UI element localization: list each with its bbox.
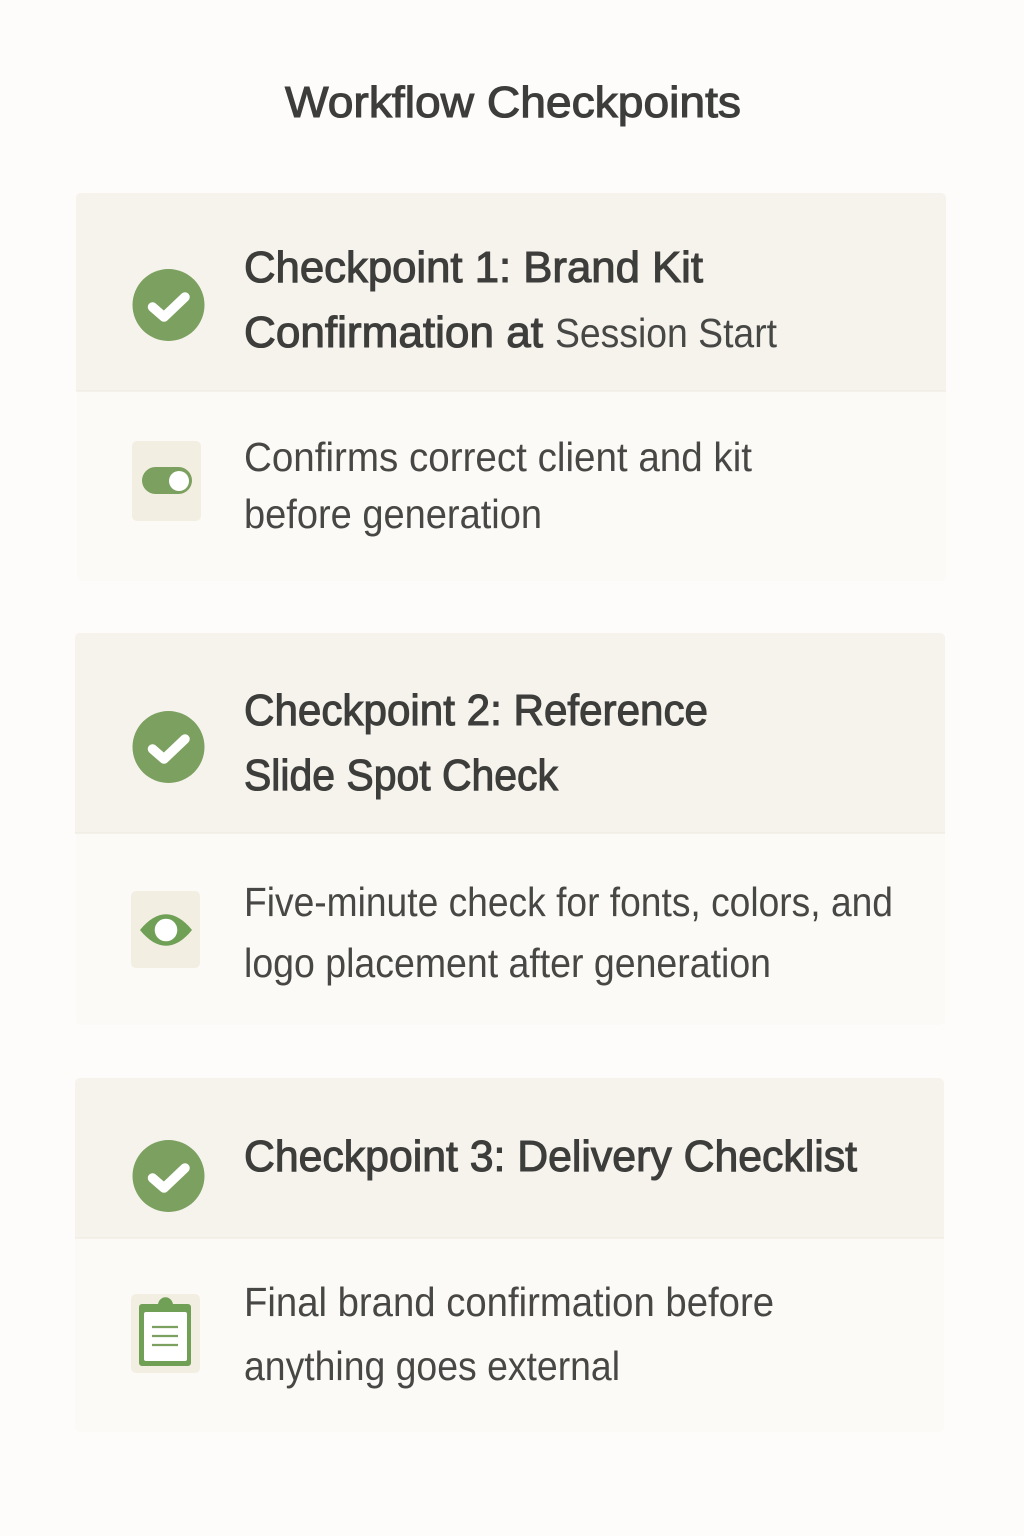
panel 1 header background (76, 193, 946, 391)
description: checkpoint 1: before generation (244, 491, 542, 537)
panel 2 body background (76, 633, 945, 1025)
description: checkpoint 2: logo placement after generation (244, 940, 771, 986)
panel 2 header background (75, 633, 945, 833)
icon: green check circle 1 (132, 269, 204, 341)
panel: checkpoint 1 (76, 193, 946, 581)
heading: checkpoint 2: Slide Spot Check (244, 751, 559, 800)
icon: green check circle 3 (132, 1140, 204, 1212)
heading: checkpoint 1: Confirmation at (244, 308, 543, 357)
description: checkpoint 2 (244, 879, 893, 986)
panel 3 body background (75, 1078, 944, 1432)
heading: checkpoint 1 (244, 243, 778, 357)
icon: clipboard (131, 1294, 200, 1373)
heading: checkpoint 3: Checkpoint 3: Delivery Checklist (244, 1132, 857, 1181)
icon: toggle switch (132, 441, 201, 521)
description: checkpoint 1 (244, 434, 753, 537)
panel: checkpoint 2 (75, 633, 945, 1025)
icon: green check circle 2 (132, 711, 204, 783)
description: checkpoint 3 (244, 1279, 774, 1389)
description: checkpoint 3: anything goes external (244, 1343, 620, 1389)
panel 3 header background (75, 1078, 944, 1238)
icon: eye (131, 891, 200, 968)
description: checkpoint 2: Five-minute check for fonts, colors, and (244, 879, 893, 925)
heading: checkpoint 2: Checkpoint 2: Reference (244, 686, 708, 735)
description: checkpoint 1: Confirms correct client and kit (244, 434, 753, 480)
description: checkpoint 3: Final brand confirmation before (244, 1279, 774, 1325)
panel: checkpoint 3 (75, 1078, 944, 1432)
heading: checkpoint 1: Checkpoint 1: Brand Kit (244, 243, 703, 292)
heading: checkpoint 2 (244, 686, 708, 800)
title: Workflow Checkpoints (285, 78, 741, 127)
panel 1 body background (77, 193, 946, 581)
heading: checkpoint 1: Session Start (555, 310, 778, 356)
